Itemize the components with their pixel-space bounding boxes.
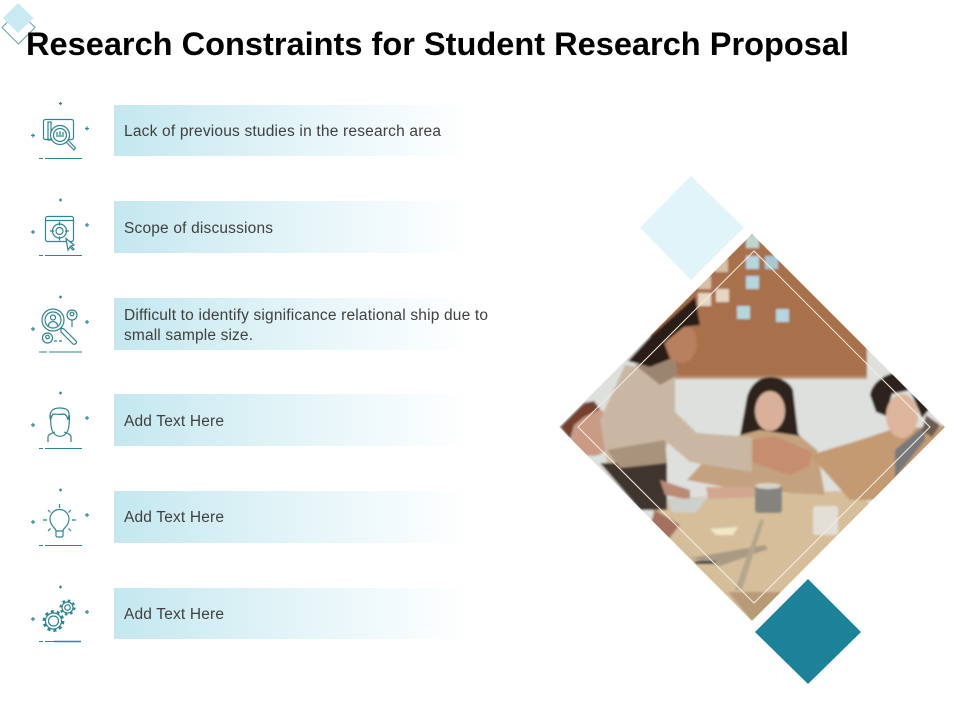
icon: chart under magnifier (31, 102, 89, 158)
row 6 bar: Add Text Here (124, 606, 224, 623)
handshake (752, 436, 812, 475)
decoration: top-left diamonds (2, 3, 35, 44)
row 1 bar: Lack of previous studies in the research area (124, 123, 441, 140)
title: Research Constraints for Student Research Proposal (26, 26, 849, 62)
row 5 bar: Add Text Here (124, 509, 224, 526)
icon: gears (31, 586, 89, 642)
row 5 bar (114, 491, 470, 543)
icon: light bulb (31, 488, 89, 546)
center woman (739, 376, 801, 438)
icon: person (31, 392, 89, 448)
photo outline diamond (578, 251, 930, 603)
row 3 bar: Difficult to identify significance relational ship due to (124, 307, 488, 324)
right woman (810, 425, 950, 500)
teal diamond (755, 579, 861, 684)
icon: people search magnifier (31, 296, 89, 352)
icon: browser target with cursor (31, 198, 89, 256)
row 4 bar (114, 394, 470, 446)
table (652, 490, 870, 621)
row 2 bar (114, 201, 470, 253)
row 3 bar (114, 298, 488, 350)
row 3 bar: small sample size. (124, 327, 253, 344)
photo: team handshake in a diamond (559, 234, 945, 621)
row 4 bar: Add Text Here (124, 413, 224, 430)
props (755, 485, 782, 513)
left man (600, 463, 667, 510)
row 6 bar (114, 588, 470, 639)
row 1 bar (114, 105, 470, 156)
row 2 bar: Scope of discussions (124, 220, 273, 237)
left woman (600, 365, 752, 472)
light blue diamond (640, 176, 744, 280)
